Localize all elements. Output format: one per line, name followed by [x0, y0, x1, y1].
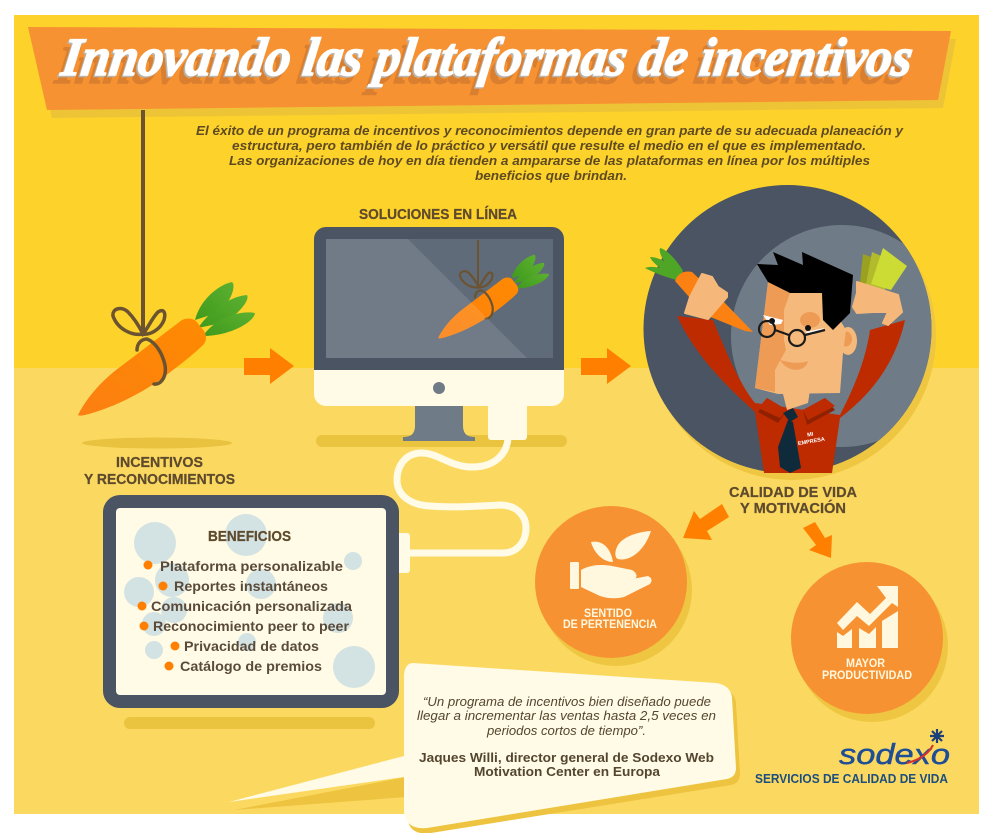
sodexo logo: SERVICIOS DE CALIDAD DE VIDA	[755, 772, 948, 786]
quote text: periodos cortos de tiempo”.	[486, 724, 646, 738]
eyes	[763, 315, 825, 335]
quote bubble	[229, 663, 740, 833]
label: soluciones en linea: SOLUCIONES EN LÍNEA	[359, 206, 517, 223]
face shade	[755, 282, 790, 392]
circle: mayor productividad	[791, 562, 948, 722]
money	[860, 248, 907, 290]
icon: screen carrot	[438, 240, 549, 338]
quote text	[417, 695, 716, 738]
plug	[488, 404, 527, 440]
circle text: MAYOR	[846, 658, 886, 670]
monitor	[314, 227, 567, 553]
intro text: estructura, pero también de lo práctico y versátil que resulte el medio en el que es implementado.	[232, 139, 866, 153]
heading: BENEFICIOS	[208, 529, 291, 545]
quote text: “Un programa de incentivos bien diseñado puede	[423, 695, 711, 709]
label: calidad de vida: Y MOTIVACIÓN	[740, 499, 846, 517]
ear	[839, 327, 857, 355]
benefits list: Reportes instantáneos	[174, 578, 328, 594]
tablet shelf	[124, 717, 375, 729]
circle text: SENTIDO	[584, 608, 632, 620]
carrot in hand	[645, 248, 753, 332]
quote author: Motivation Center en Europa	[474, 765, 661, 779]
tablet connector	[396, 533, 410, 573]
tie	[778, 408, 801, 473]
arrow: monitor to character	[581, 348, 631, 384]
glasses	[759, 321, 825, 346]
benefits list: Catálogo de premios	[180, 658, 322, 674]
sodexo logo	[755, 729, 950, 786]
quote author	[419, 751, 714, 779]
shirt	[677, 316, 905, 473]
title: Innovando las plataformas de incentivos	[56, 29, 915, 88]
left hand	[685, 274, 727, 319]
rope	[141, 110, 145, 336]
quote author: Jaques Willi, director general de Sodexo Web	[419, 751, 714, 765]
intro text: Las organizaciones de hoy en día tienden a ampararse de las plataformas en línea por los múltiples	[229, 154, 870, 168]
right hand	[853, 282, 902, 325]
intro text: El éxito de un programa de incentivos y reconocimientos depende en gran parte de su adecuada planeación y	[196, 124, 904, 138]
circle text	[822, 658, 912, 682]
intro text: beneficios que brindan.	[475, 169, 627, 183]
monitor button	[433, 382, 445, 394]
quote text: llegar a incrementar las ventas hasta 2,5 veces en	[417, 709, 716, 723]
collar	[758, 398, 835, 425]
benefits list: Reconocimiento peer to peer	[153, 618, 350, 634]
face	[755, 282, 846, 394]
smile	[780, 360, 808, 370]
title: Innovando las plataformas de incentivos	[51, 35, 911, 95]
label: incentivos: INCENTIVOS	[116, 455, 203, 471]
benefits list: Privacidad de datos	[184, 638, 319, 654]
arrow: to sentido de pertenencia	[683, 504, 729, 540]
circle text: DE PERTENENCIA	[563, 619, 657, 631]
cable	[397, 438, 526, 553]
arrow: carrot to monitor	[244, 348, 294, 384]
benefits list: Plataforma personalizable	[160, 558, 343, 574]
label: incentivos: Y RECONOCIMIENTOS	[84, 472, 235, 488]
label: calidad de vida: CALIDAD DE VIDA	[729, 485, 858, 501]
shirt logo: EMPRESA	[798, 437, 825, 447]
sodexo logo: sodexo	[839, 739, 950, 771]
title banner	[28, 27, 956, 118]
benefits list: Comunicación personalizada	[151, 598, 352, 614]
neck	[782, 390, 810, 410]
icon: hanging carrot	[78, 282, 255, 416]
tablet: beneficios	[103, 495, 399, 708]
circle text	[563, 608, 657, 631]
bubbles	[124, 514, 375, 688]
shirt logo: MI	[807, 431, 814, 439]
icon: growth chart	[837, 586, 898, 648]
benefits list	[151, 558, 352, 674]
character circle	[644, 185, 953, 480]
label: calidad de vida	[729, 485, 858, 517]
intro text	[196, 124, 904, 183]
label: incentivos	[84, 455, 235, 488]
circle text: PRODUCTIVIDAD	[822, 670, 912, 682]
bullets	[138, 560, 180, 670]
carrot shadow	[82, 438, 232, 448]
title: Innovando las plataformas de incentivos	[57, 27, 917, 87]
eyelid	[800, 312, 820, 328]
circle: sentido de pertenencia	[535, 506, 692, 666]
shirt logo	[796, 430, 825, 447]
hair	[757, 252, 853, 330]
icon: hand and plant	[570, 531, 652, 598]
character	[645, 248, 907, 473]
arrow: to mayor productividad	[803, 522, 832, 558]
